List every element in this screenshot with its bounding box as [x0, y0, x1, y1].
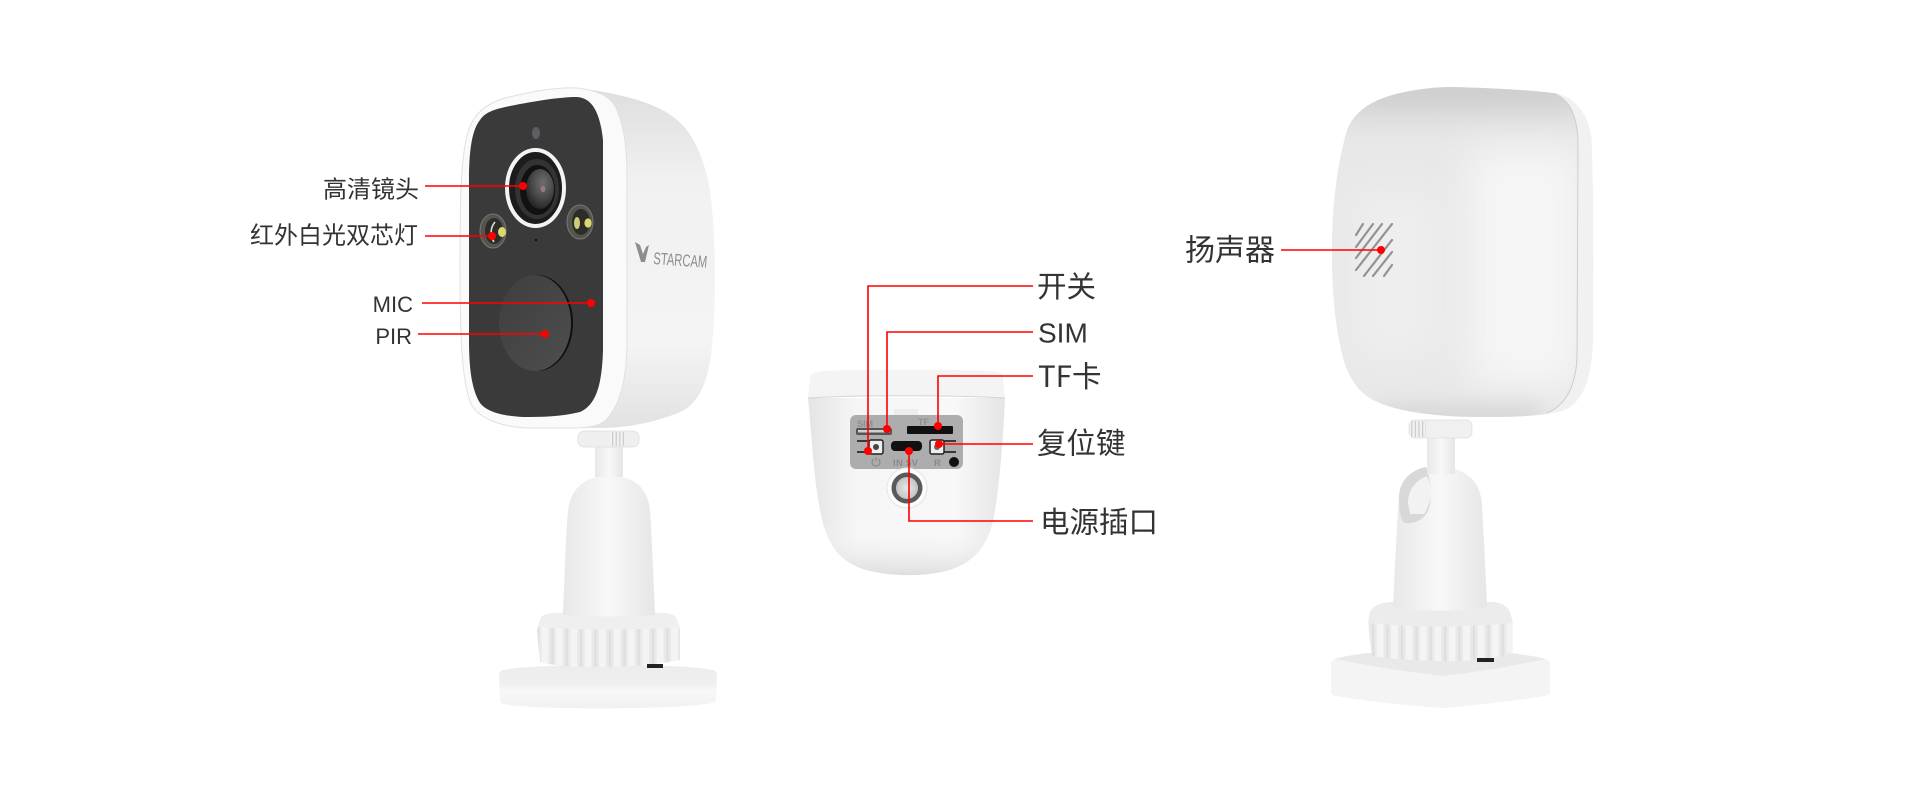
label: MIC [373, 292, 595, 317]
SIM slot: SIM [857, 419, 873, 429]
label: dual LED: 红外白光双芯灯 [250, 216, 418, 250]
mount knob [887, 468, 927, 508]
front camera [460, 88, 717, 708]
camera body side [460, 88, 715, 428]
label: SIM: SIM [1038, 318, 1088, 348]
port captions: IN 5V [893, 458, 919, 469]
back stand [1331, 420, 1550, 708]
right LED [567, 205, 593, 239]
label: reset key [935, 420, 1126, 462]
top rim [808, 370, 1005, 398]
label: power port [905, 447, 1158, 542]
label: PIR [375, 324, 549, 349]
label: SIM [883, 318, 1088, 433]
microphone hole [535, 239, 537, 241]
brand logo [635, 242, 708, 272]
label: HD lens [323, 170, 527, 204]
speaker grille [1356, 224, 1392, 276]
PIR window [499, 275, 573, 371]
lens [507, 150, 564, 226]
brand logo: STARCAM [653, 249, 708, 272]
TF slot: TF [918, 417, 929, 427]
camera bezel [460, 88, 627, 428]
bottom shell [808, 398, 1005, 575]
port tab [894, 409, 918, 416]
label: TF card: TF卡 [1038, 354, 1101, 396]
label: switch [864, 264, 1096, 455]
camera dark panel [469, 97, 603, 417]
reset button [930, 440, 956, 454]
reset caption: R [934, 458, 941, 469]
label: speaker [1185, 226, 1385, 270]
power switch [857, 440, 883, 454]
back shell [1332, 87, 1594, 417]
left LED [480, 214, 506, 248]
label: MIC: MIC [373, 292, 413, 317]
back camera [1330, 65, 1600, 708]
label: switch: 开关 [1037, 264, 1096, 306]
label: HD lens: 高清镜头 [323, 170, 419, 204]
label: speaker: 扬声器 [1185, 226, 1275, 270]
power symbol [872, 457, 880, 466]
power port [891, 441, 922, 451]
light sensor [532, 127, 540, 139]
label: dual LED [250, 216, 496, 250]
label: reset key: 复位键 [1037, 420, 1126, 462]
label: TF card [934, 354, 1101, 430]
bottom view of camera [808, 370, 1005, 575]
indicator hole [949, 457, 959, 467]
front stand [499, 431, 717, 708]
label: PIR: PIR [375, 324, 412, 349]
label: power port: 电源插口 [1040, 500, 1158, 542]
port panel [850, 415, 963, 469]
